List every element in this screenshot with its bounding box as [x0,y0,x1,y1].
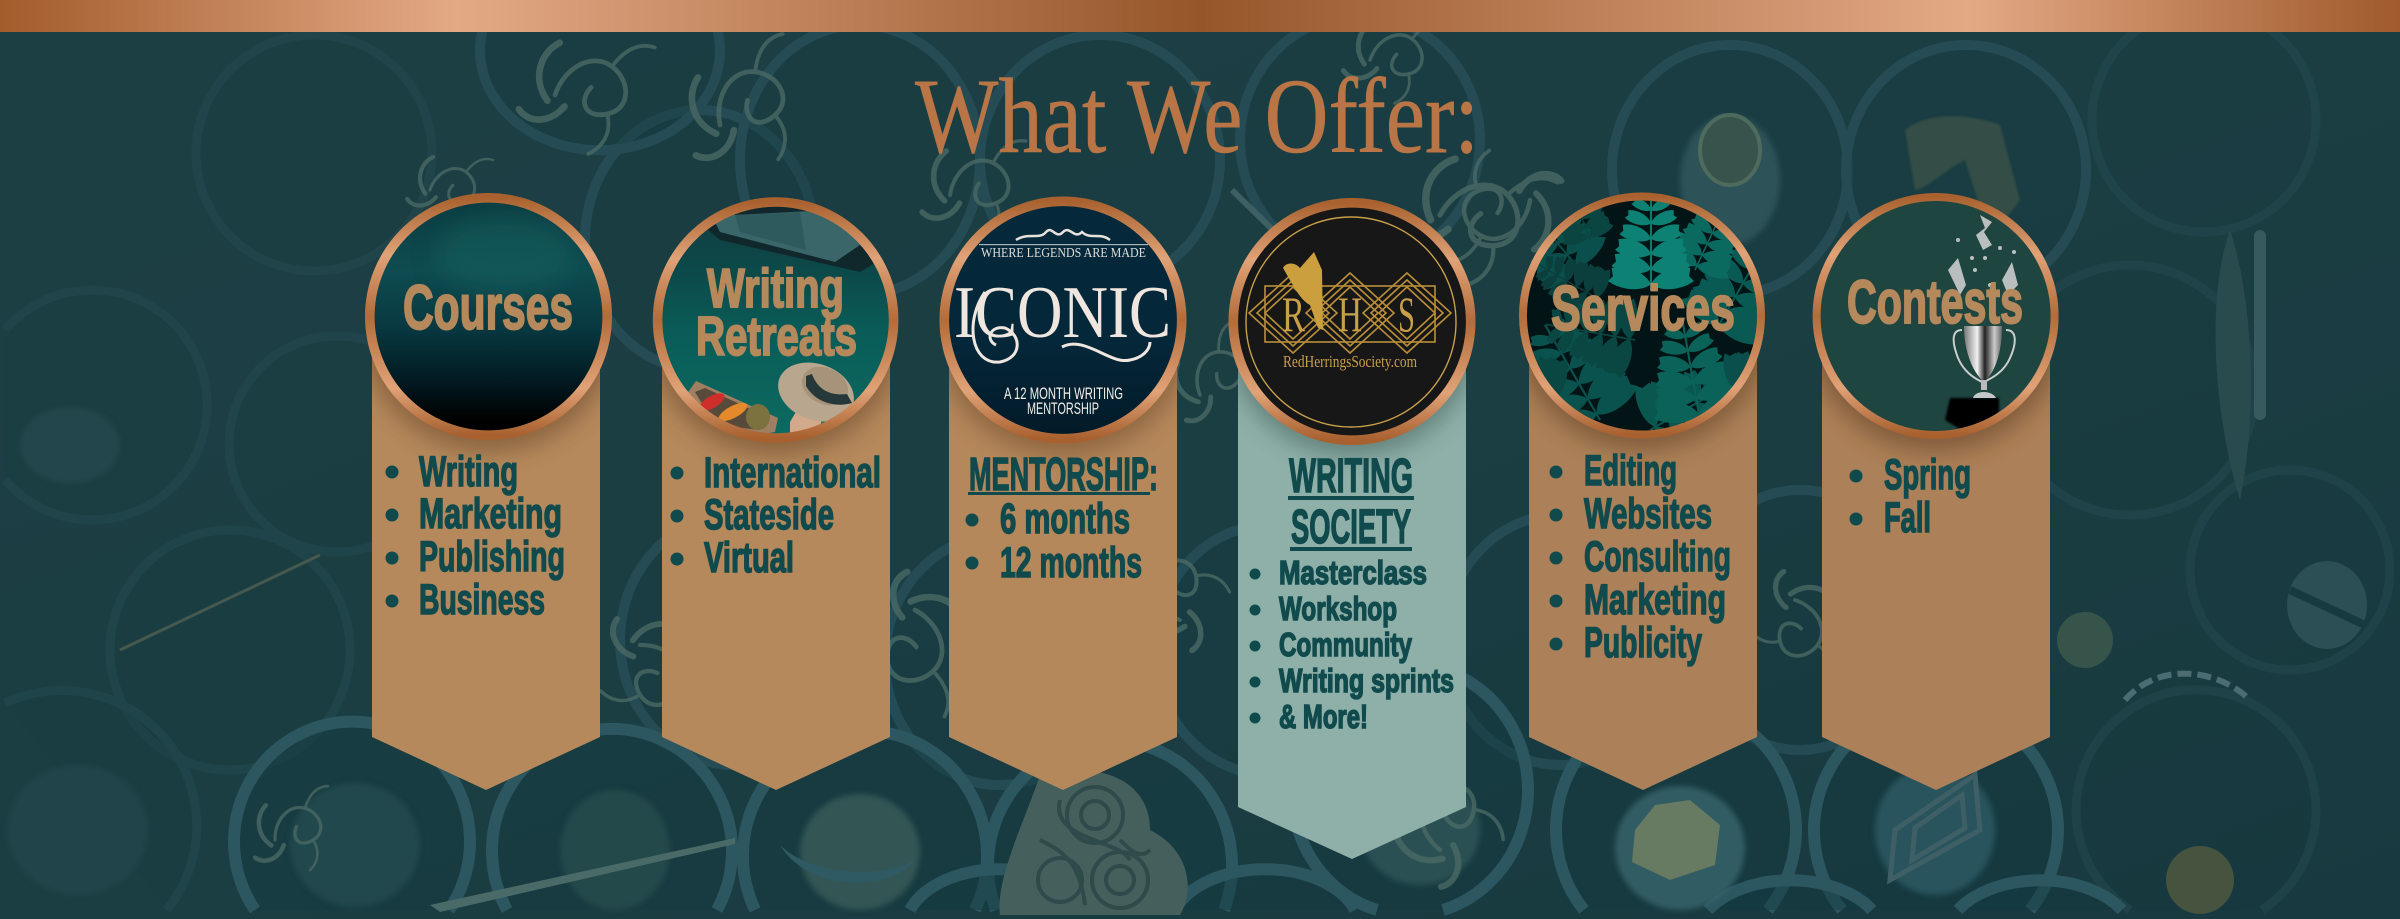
letters: RHS [1282,286,1415,342]
circle: iconic logo [944,201,1182,439]
list: mentorship: 6 months [1000,495,1130,543]
list: mentorship [966,495,1142,587]
heading: Services: Services [1551,274,1735,344]
art deco diamonds [1249,273,1451,353]
list: society: & More! [1279,698,1368,735]
heading: Contests: Contests [1847,268,2023,336]
heading: Writing Retreats [696,257,857,367]
letters: RHS: H [1338,286,1362,342]
circle: retreats image [658,202,894,440]
list: courses: Publishing [419,533,565,581]
circle: courses image [370,198,607,435]
list: services: Publicity [1584,619,1702,667]
circle shadow [1822,362,2050,461]
list: society [1250,554,1454,735]
fox head [1283,252,1323,330]
background crown and diamond charms [1632,775,1980,880]
swashes [973,292,1150,362]
text: a 12 month writing mentorship: A 12 MONTH WRITING [1004,384,1123,403]
top copper bar [0,0,2400,32]
list: services: Consulting [1584,533,1731,581]
list: society: Masterclass [1279,554,1427,591]
circle shadow [1238,369,1466,467]
ribbon: services [1529,320,1757,790]
list: society: Community [1279,626,1412,663]
panel: contests [1808,195,2064,790]
trophy [1954,326,2015,398]
heading: writing society: SOCIETY [1291,501,1411,554]
circle shadow [662,365,890,465]
url: RedHerringsSociety.com [1283,352,1417,371]
list: society: Workshop [1279,590,1397,627]
circle shadow [949,368,1177,464]
ornament [1016,230,1110,240]
list: retreats: Stateside [704,491,834,539]
text: a 12 month writing mentorship: MENTORSHIP [1027,399,1099,418]
ribbon: courses [372,320,600,790]
ribbon: society [1238,320,1466,859]
wordmark: iconic: ICONIC [954,272,1171,354]
circle: RHS logo [1233,203,1471,440]
list: retreats [670,449,881,582]
heading: writing society [1288,450,1414,554]
list: retreats: Virtual [704,534,794,582]
panel: services [1519,192,1765,790]
background celtic knot [999,770,1188,915]
list: courses [386,448,565,624]
list: society: Writing sprints [1279,662,1454,699]
streamers and stars [1948,215,2018,295]
trophy shadow [1945,398,1999,432]
list: courses: Marketing [419,490,562,538]
panel: mentorship [935,200,1191,790]
list: retreats: International [704,449,881,497]
heading: Courses: Courses [403,273,573,343]
panel: courses [360,196,616,790]
text: a 12 month writing mentorship [1004,384,1123,418]
list: services [1550,447,1731,667]
letters: RHS: R [1282,286,1305,342]
circle shadow [372,358,600,462]
text: where legends are made: WHERE LEGENDS ARE MADE [981,245,1146,260]
heading: writing society: WRITING [1289,450,1413,503]
list: courses: Writing [419,448,518,496]
heading: mentorship [968,448,1158,500]
list: contests: Spring [1884,451,1971,499]
ribbon: retreats [662,320,890,790]
list: contests [1850,451,1971,542]
list: courses: Business [419,576,545,624]
list: services: Editing [1584,447,1677,495]
heading: Writing Retreats: Retreats [696,305,857,367]
list: contests: Fall [1884,494,1931,542]
panel: writing retreats [648,199,904,790]
heading: mentorship: MENTORSHIP: [969,448,1158,500]
list: mentorship: 12 months [1000,539,1142,587]
circle: fern image [1519,192,1765,438]
circle shadow [1529,360,1757,460]
ribbon: contests [1822,320,2050,790]
list: services: Websites [1584,490,1712,538]
title: What We Offer: [915,58,1479,176]
list: services: Marketing [1584,576,1726,624]
circle: trophy image [1817,197,2055,435]
letters: RHS: S [1398,286,1415,342]
ribbon: mentorship [949,320,1177,790]
panel: writing society [1226,203,1478,859]
background scrollwork ornaments [240,22,1836,901]
heading: Writing Retreats: Writing [707,257,844,319]
